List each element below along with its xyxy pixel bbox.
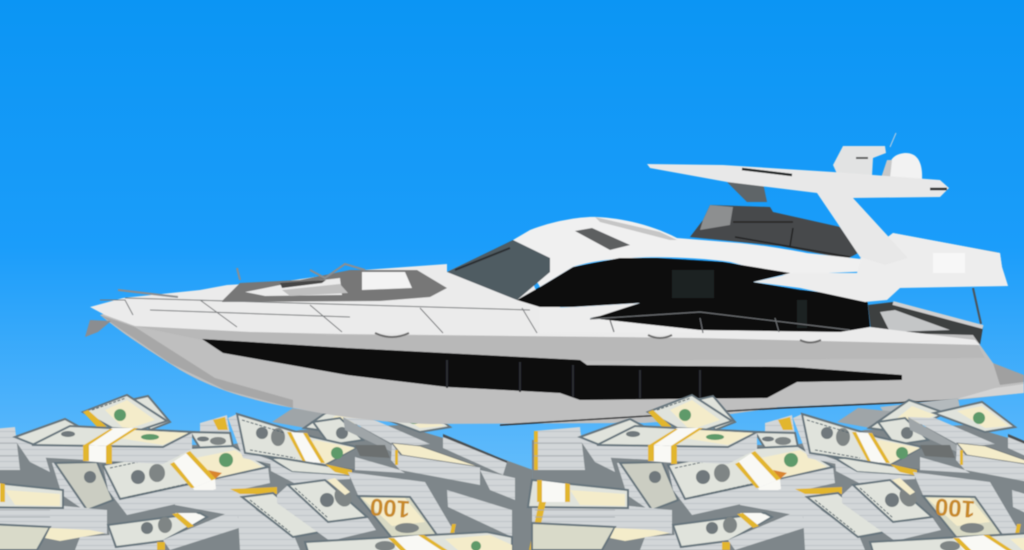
mast antenna <box>890 133 896 147</box>
money bundle: tilted right <box>277 478 376 541</box>
foredeck <box>90 240 980 345</box>
money pile: right copy <box>528 395 1024 550</box>
money stack with 100 bill <box>348 472 456 538</box>
hardtop dark trim <box>742 169 947 189</box>
yacht <box>85 133 1024 425</box>
bow anchor <box>85 320 111 337</box>
windshield <box>447 240 550 300</box>
hull dark keel line <box>500 400 958 425</box>
radar housing <box>833 146 886 176</box>
flybridge seating <box>690 205 858 259</box>
money bundle: bottom centre <box>108 510 242 550</box>
rear deck box <box>933 253 965 273</box>
rear flybridge deck <box>860 233 1008 287</box>
roof rear shading <box>595 217 677 240</box>
side deck spear <box>540 303 700 333</box>
main cabin windows <box>517 258 870 332</box>
foredeck windlass pipework <box>118 264 365 297</box>
money pile: left copy <box>0 395 533 550</box>
rear cockpit <box>868 302 983 345</box>
money slab: right grey <box>443 434 507 475</box>
money bill: hidden under hull left <box>304 400 380 433</box>
swim platform <box>993 363 1024 385</box>
money bundle: lower centre front <box>238 493 320 550</box>
rear post <box>973 288 981 324</box>
hull lower grey <box>100 312 1024 424</box>
money bill: bottom right <box>305 532 512 550</box>
money bundle: thin flat <box>391 443 480 485</box>
rear overhang <box>753 233 1008 302</box>
money bundle: top back <box>83 395 167 435</box>
money bundle: left banded <box>32 426 192 464</box>
money bundle: dark bill <box>55 462 113 510</box>
rear deck dark trim <box>895 236 996 259</box>
superstructure roof <box>513 217 900 287</box>
radar dome <box>881 153 922 180</box>
money stack with 100 bill: 100 <box>369 493 411 522</box>
strut under hardtop <box>727 182 767 202</box>
money bundle: far left banded <box>0 480 63 550</box>
money slab: lower centre <box>175 487 277 517</box>
hull upper grey band <box>135 326 985 361</box>
windshield shading <box>455 248 510 270</box>
side deck rails <box>590 312 850 333</box>
foredeck seating <box>222 270 447 302</box>
foredeck rails <box>100 298 537 333</box>
mooring cleats <box>375 333 821 342</box>
cabin window detail <box>672 270 807 328</box>
hull black window strip <box>202 339 902 400</box>
money bill: hidden under hull right <box>369 402 450 432</box>
money bundle: large centre <box>103 446 270 515</box>
money bundle: upper centre banded <box>228 414 357 470</box>
roof skylight <box>575 228 630 250</box>
hardtop arch <box>647 164 949 265</box>
hull shaded bow edge <box>100 315 293 408</box>
money bill: bottom left <box>0 523 105 550</box>
